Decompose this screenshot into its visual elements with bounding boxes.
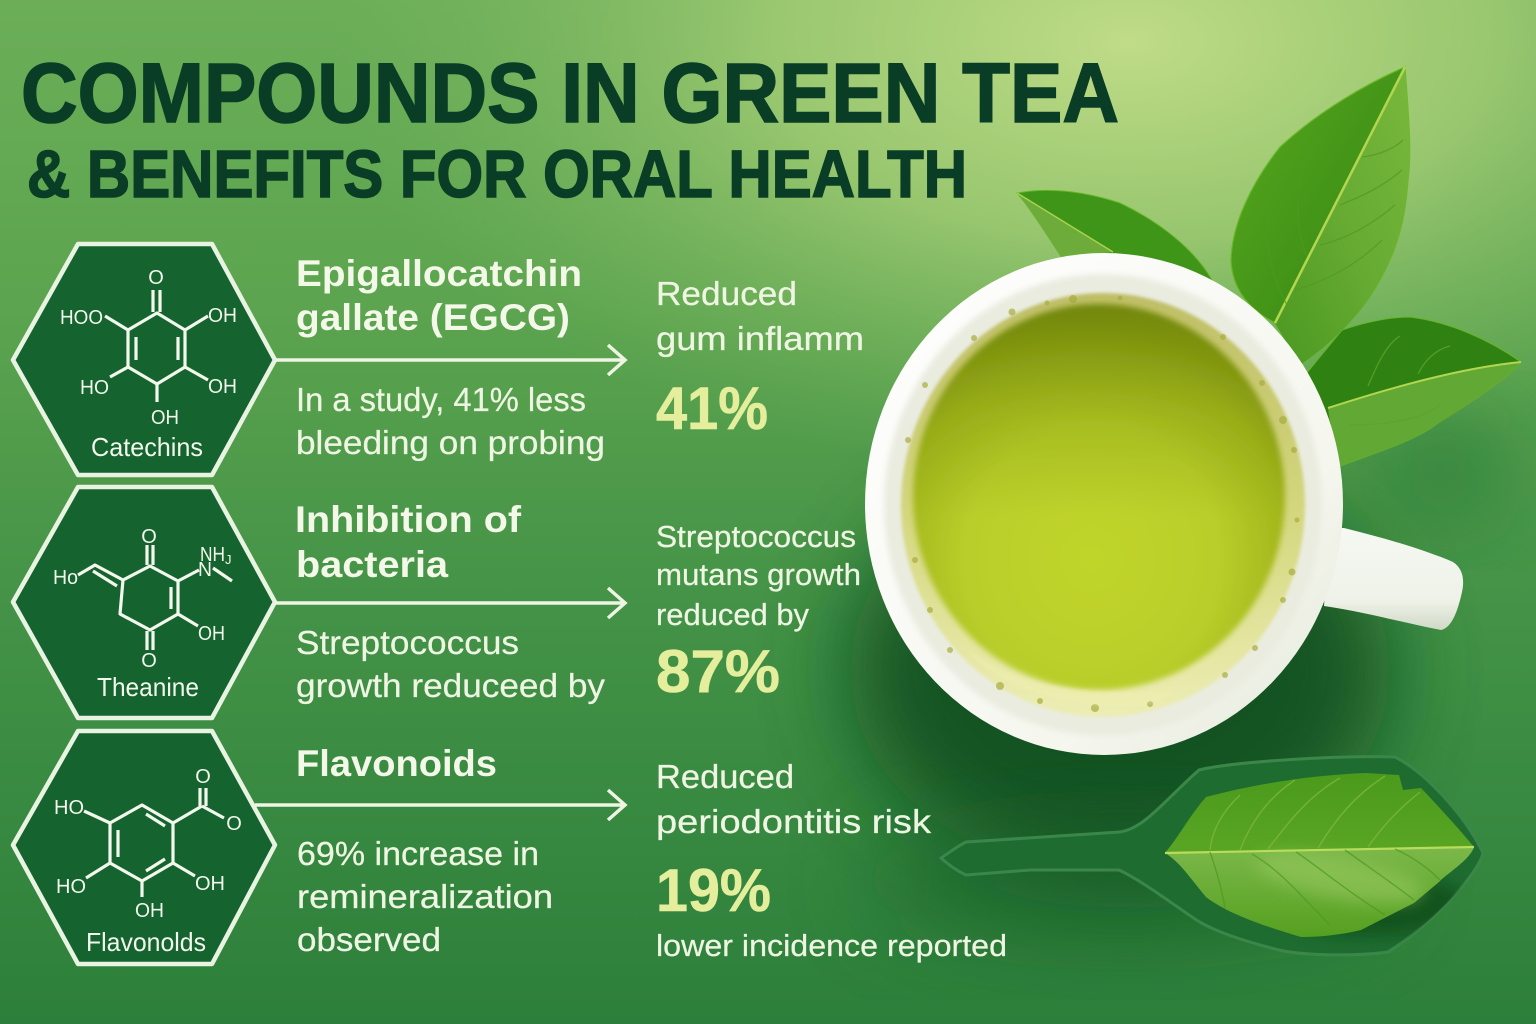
leaf: top large xyxy=(1231,67,1410,365)
foam bubbles xyxy=(905,295,1300,712)
liquid highlight xyxy=(968,650,1175,706)
flavonoids molecule xyxy=(54,766,242,922)
theanine molecule: O xyxy=(141,526,157,548)
text: bleeding study: bleeding on probing xyxy=(296,424,605,461)
stat: periodontitis: periodontitis risk xyxy=(656,803,932,840)
heading: inhibition of bacteria: bacteria xyxy=(296,544,448,585)
theanine molecule: NH xyxy=(200,544,225,566)
tea surface xyxy=(913,304,1285,690)
flavonoids molecule: O xyxy=(195,766,211,788)
heading: EGCG xyxy=(296,253,582,338)
flavonoids molecule: OH xyxy=(195,873,225,895)
label: flavonolds: Flavonolds xyxy=(86,927,206,957)
hexagon: theanine xyxy=(13,487,275,718)
catechins molecule: HOO xyxy=(60,307,103,329)
stat: periodontitis: 19% xyxy=(656,857,771,924)
hexagon: flavonoids xyxy=(13,731,275,964)
stat: gum inflammation xyxy=(656,275,864,442)
spoon shadow xyxy=(1320,878,1462,941)
text: remineralization: remineralization xyxy=(297,878,553,915)
catechins molecule: HO xyxy=(80,377,109,399)
stat: periodontitis xyxy=(656,758,1007,963)
stat: gum inflammation: 41% xyxy=(656,375,768,442)
stat: streptococcus mutans: reduced by xyxy=(656,597,809,632)
heading: EGCG: gallate (EGCG) xyxy=(296,297,570,338)
text: streptococcus growth: growth reduceed by xyxy=(296,667,606,704)
leaf: right xyxy=(1305,317,1521,466)
leaf: left xyxy=(1017,190,1212,300)
row 3 xyxy=(13,731,1007,964)
flavonoids molecule: O xyxy=(226,813,242,835)
theanine molecule: J xyxy=(225,552,232,567)
stat: streptococcus mutans: 87% xyxy=(656,638,780,705)
hexagon: catechins xyxy=(13,244,275,475)
stat: streptococcus mutans xyxy=(656,519,861,705)
stat: streptococcus mutans: mutans growth xyxy=(656,557,861,592)
heading: EGCG: Epigallocatchin xyxy=(296,253,582,294)
theanine molecule: N xyxy=(198,559,212,581)
heading: inhibition of bacteria xyxy=(295,499,522,585)
tea cup xyxy=(865,253,1463,755)
arrow 3 xyxy=(255,790,625,820)
flavonoids molecule: HO xyxy=(56,876,86,898)
arrow 2 xyxy=(275,588,625,618)
catechins molecule xyxy=(60,267,237,429)
label: theanine: Theanine xyxy=(97,672,199,702)
cup rim xyxy=(865,253,1343,755)
title xyxy=(21,46,1119,212)
text: streptococcus growth xyxy=(296,624,606,704)
flavonoids molecule: HO xyxy=(54,797,84,819)
flavonoids molecule: OH xyxy=(135,900,164,922)
catechins molecule: OH xyxy=(208,305,237,327)
text: remineralization xyxy=(297,835,553,958)
spoon xyxy=(941,757,1483,955)
leaves behind the cup xyxy=(1017,67,1521,466)
title line 1: COMPOUNDS IN GREEN TEA xyxy=(21,46,1119,140)
stat: gum inflammation: Reduced xyxy=(656,275,797,312)
text: remineralization: 69% increase in xyxy=(297,835,539,872)
stat: periodontitis: Reduced xyxy=(656,758,794,795)
theanine molecule xyxy=(53,526,232,672)
catechins molecule: O xyxy=(148,267,164,289)
catechins molecule: OH xyxy=(151,407,179,429)
foam ring xyxy=(901,293,1305,717)
spoon with leaf xyxy=(941,757,1483,955)
arrow 1 xyxy=(275,345,625,375)
theanine molecule: O xyxy=(141,650,157,672)
label: catechins: Catechins xyxy=(91,432,203,462)
catechins molecule: OH xyxy=(208,376,237,398)
stat: streptococcus mutans: Streptococcus xyxy=(656,519,856,554)
stat: periodontitis: lower incidence reported xyxy=(656,928,1007,963)
row 2 xyxy=(13,487,861,718)
cup handle xyxy=(1324,528,1463,630)
theanine molecule: OH xyxy=(198,623,225,645)
text: bleeding study: In a study, 41% less xyxy=(296,381,586,418)
leaf on spoon xyxy=(1165,773,1474,937)
text: bleeding study xyxy=(296,381,605,461)
heading: inhibition of bacteria: Inhibition of xyxy=(295,499,522,540)
row 1 xyxy=(13,244,864,475)
text: remineralization: observed xyxy=(297,921,441,958)
heading: flavonoids: Flavonoids xyxy=(296,743,497,784)
theanine molecule: Ho xyxy=(53,567,78,589)
text: streptococcus growth: Streptococcus xyxy=(296,624,519,661)
stat: gum inflammation: gum inflamm xyxy=(656,320,864,357)
title line 2: & BENEFITS FOR ORAL HEALTH xyxy=(27,137,967,212)
